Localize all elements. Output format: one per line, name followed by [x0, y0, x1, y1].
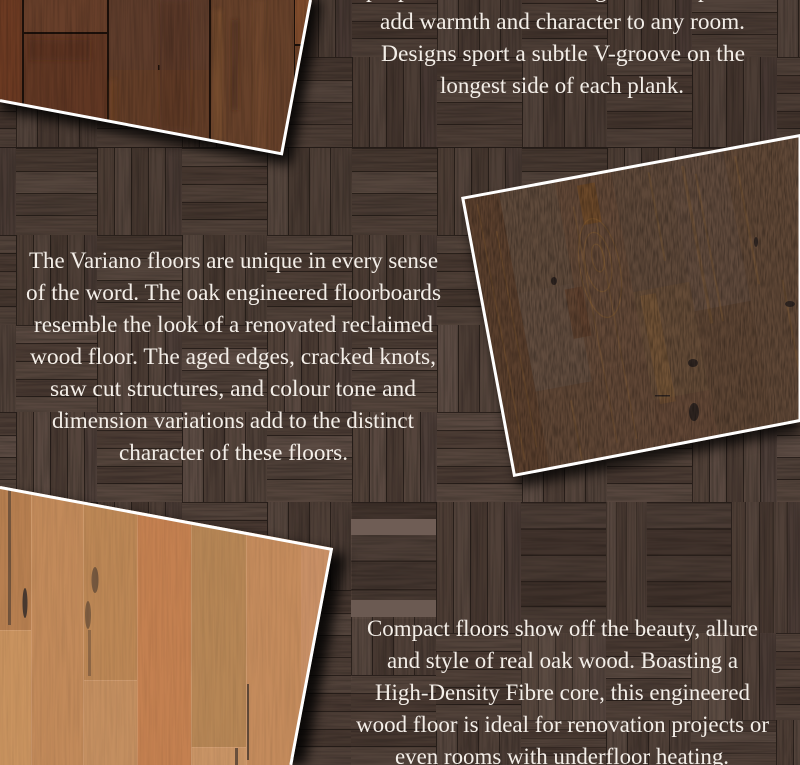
text block: V-groove description: longest side of each plank. [440, 73, 684, 99]
photo 1: dark walnut planks, top left [0, 0, 322, 165]
text block: Compact floors description: wood floor is ideal for renovation projects or [356, 712, 769, 738]
text block: Variano floors description: wood floor. The aged edges, cracked knots, [30, 344, 436, 370]
photo 2: smoked oak planks, right [440, 120, 800, 490]
text block: Compact floors description: Compact floors show off the beauty, allure [367, 616, 758, 642]
text block: Compact floors description: and style of real oak wood. Boasting a [387, 648, 739, 674]
text block: Variano floors description: saw cut structures, and colour tone and [50, 376, 416, 402]
text block: V-groove description: add warmth and character to any room. [380, 9, 745, 35]
text block: Variano floors description: character of these floors. [119, 440, 348, 466]
text block: Variano floors description: of the word. The oak engineered floorboards [26, 280, 441, 306]
photo 3: light oak planks, bottom left [0, 480, 346, 765]
text block: Variano floors description: dimension variations add to the distinct [52, 408, 414, 434]
text block: V-groove description: Designs sport a subtle V-groove on the [381, 41, 745, 67]
text block: Variano floors description: The Variano floors are unique in every sense [29, 248, 438, 274]
text block: Variano floors description [26, 248, 441, 466]
text block: Variano floors description: resemble the look of a renovated reclaimed [34, 312, 433, 338]
text block: Compact floors description [356, 616, 769, 765]
text block: V-groove description [366, 0, 745, 99]
text block: Compact floors description: High-Density Fibre core, this engineered [375, 680, 750, 706]
